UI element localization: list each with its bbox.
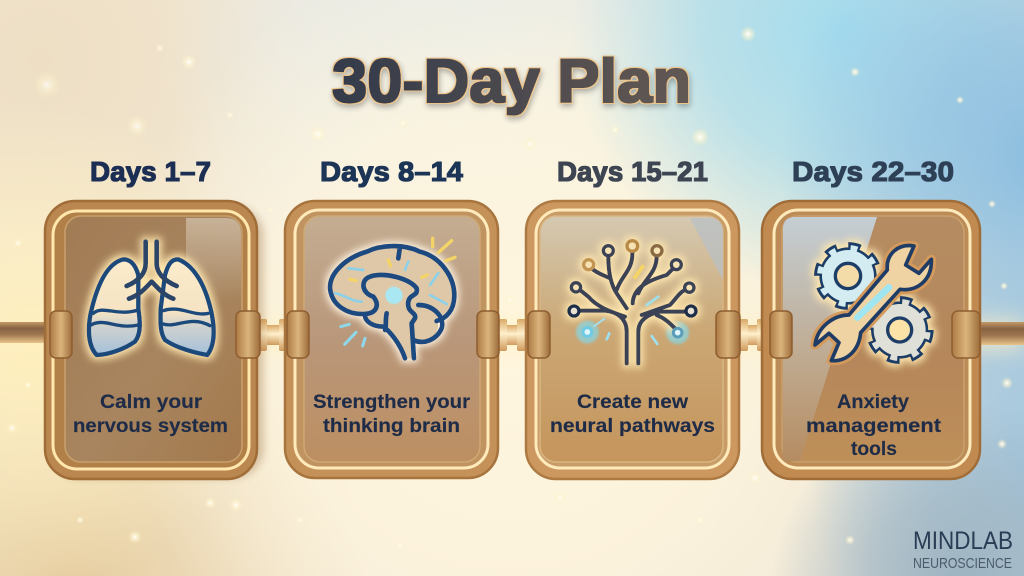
caption: thinking brain	[323, 416, 460, 437]
panel: days 1-7	[45, 201, 264, 479]
caption	[313, 392, 471, 437]
left bracket	[50, 311, 72, 358]
caption: nervous system	[73, 416, 228, 437]
caption: Calm your	[100, 392, 203, 413]
right bracket	[236, 311, 260, 358]
caption: Create new	[577, 392, 688, 413]
heading: days 22-30: Days 22–30	[792, 156, 954, 187]
pipe right end	[980, 322, 1024, 345]
connector 2	[496, 319, 528, 351]
caption: tools	[851, 439, 897, 460]
heading: days 15-21: Days 15–21	[557, 156, 708, 187]
left bracket	[528, 311, 550, 358]
connector 1	[258, 319, 290, 351]
title: 30-Day Plan	[332, 47, 691, 115]
caption: Strengthen your	[313, 392, 471, 413]
icon: neural tree	[569, 241, 696, 363]
icon: lower gear	[870, 301, 929, 359]
logo: Mindlab Neuroscience: MINDLAB	[913, 527, 1013, 555]
left bracket	[770, 311, 792, 358]
connecting pipe	[0, 319, 1024, 351]
icon: gears and wrench	[815, 246, 931, 361]
caption: management	[806, 416, 942, 437]
connector 3	[738, 319, 768, 351]
panel: days 15-21	[526, 201, 740, 479]
right bracket	[952, 311, 980, 358]
right bracket	[477, 311, 499, 358]
panel: days 22-30	[762, 201, 980, 479]
caption: neural pathways	[550, 416, 715, 437]
right bracket	[716, 311, 740, 358]
caption	[73, 392, 228, 437]
caption: Anxiety	[837, 392, 909, 413]
panel: days 8-14	[285, 201, 499, 478]
icon: brain	[330, 238, 455, 358]
caption	[806, 392, 942, 460]
logo: Mindlab Neuroscience	[913, 527, 1013, 572]
left bracket	[287, 311, 309, 358]
icon: upper gear	[819, 247, 877, 305]
pipe left end	[0, 322, 44, 343]
heading: days 1-7: Days 1–7	[90, 156, 211, 187]
heading: days 8-14: Days 8–14	[320, 156, 463, 187]
icon: wrench	[815, 246, 931, 361]
caption	[550, 392, 715, 437]
icon: lungs	[89, 242, 214, 355]
